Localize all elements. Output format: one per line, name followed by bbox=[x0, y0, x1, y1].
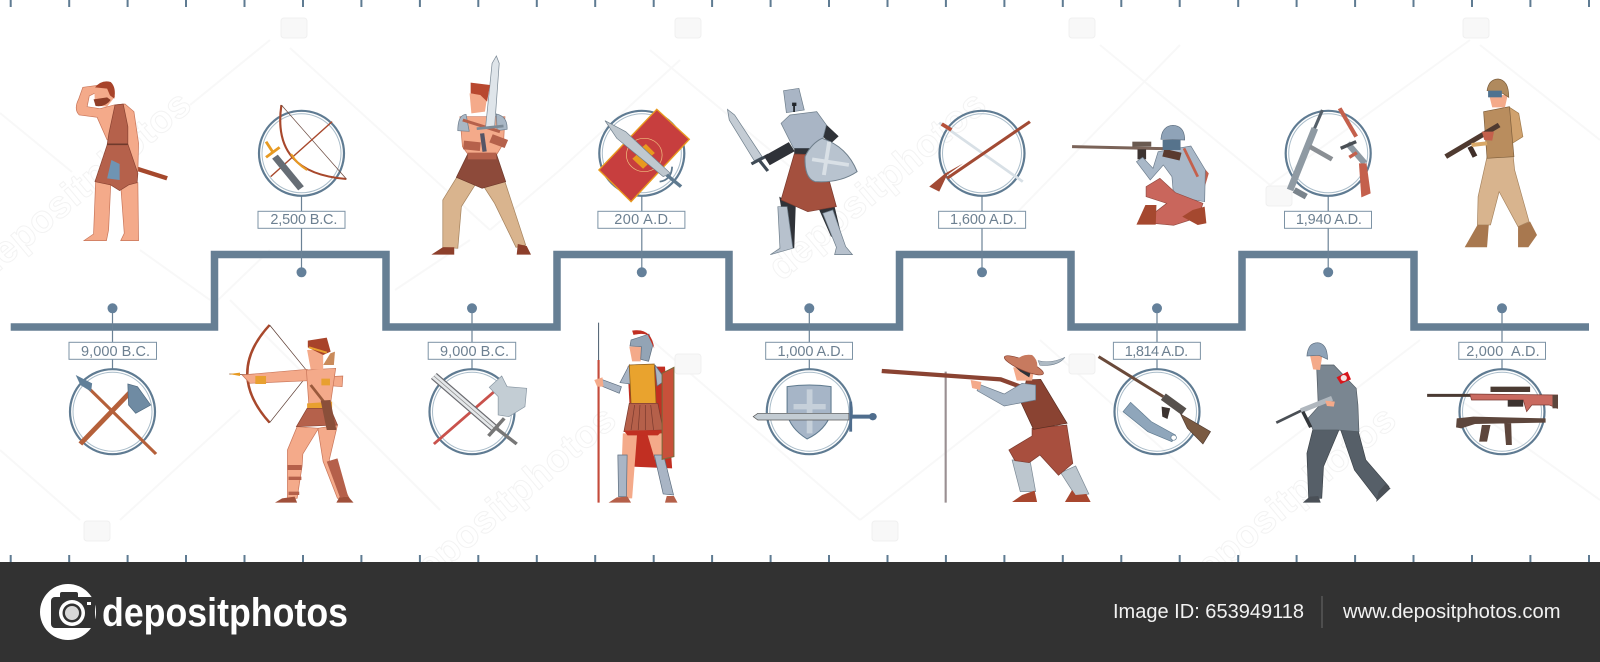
stepped timeline line bbox=[11, 254, 1589, 327]
milestone: 1,600 A.D.: 1,600 A.D. bbox=[950, 212, 1017, 228]
milestone: 1,940 A.D.: 1,940 A.D. bbox=[1296, 212, 1362, 228]
figure: archer bbox=[229, 325, 354, 503]
top ruler ticks bbox=[11, 0, 1589, 7]
logo wordmark: depositphotos bbox=[102, 591, 348, 635]
milestone: 1,600 A.D. bbox=[939, 111, 1026, 277]
website: www.depositphotos.com bbox=[1342, 601, 1560, 623]
milestone: 2,500 B.C.: 2,500 B.C. bbox=[270, 212, 337, 228]
milestone: 2,000 A.D. bbox=[1459, 303, 1546, 454]
icon: shield and sword bbox=[753, 385, 877, 439]
bottom ruler ticks bbox=[11, 555, 1589, 562]
milestone: 200 A.D.: 200 A.D. bbox=[614, 212, 672, 228]
milestone: 2,000 A.D.: 2,000 A.D. bbox=[1466, 344, 1540, 360]
icon: sniper rifle and smg bbox=[1427, 387, 1558, 445]
footer bar bbox=[0, 562, 1600, 662]
watermark layer: depositphotos bbox=[760, 83, 994, 289]
figure: musketeer bbox=[882, 352, 1091, 503]
figure: roman legionary bbox=[594, 323, 677, 503]
watermark layer: depositphotos bbox=[390, 398, 624, 604]
icon: sword and bow bbox=[266, 105, 346, 188]
figure: knight bbox=[727, 88, 857, 255]
icon: rifle and grenade bbox=[1099, 357, 1211, 444]
milestone: 9,000 B.C. first bbox=[69, 303, 156, 454]
icon: roman shield and gladius bbox=[599, 109, 689, 202]
icon: long sword and battle axe bbox=[434, 376, 527, 444]
image id: Image ID: 653949118 bbox=[1113, 601, 1304, 623]
milestone: 1,000 A.D.: 1,000 A.D. bbox=[778, 344, 844, 360]
milestone: 1,000 A.D. bbox=[766, 303, 852, 454]
milestone: 200 A.D. bbox=[598, 111, 685, 277]
figure: caveman with club bbox=[76, 81, 167, 241]
figure: swordsman bbox=[431, 56, 531, 255]
milestone: 1,814 A.D.: 1,814 A.D. bbox=[1125, 344, 1188, 360]
icon: musket and sabre bbox=[929, 122, 1030, 192]
watermark layer: depositphotos bbox=[1170, 398, 1404, 604]
separator bbox=[1321, 596, 1323, 628]
figure: german soldier running bbox=[1276, 343, 1391, 503]
milestone: 1,814 A.D. bbox=[1113, 303, 1200, 454]
figure: kneeling rifleman bbox=[1072, 125, 1209, 225]
milestone: 9,000 B.C. first: 9,000 B.C. bbox=[81, 344, 150, 360]
milestone: 9,000 B.C. second bbox=[428, 303, 516, 454]
logo: depositphotos camera badge bbox=[40, 584, 96, 640]
milestone: 9,000 B.C. second: 9,000 B.C. bbox=[440, 344, 509, 360]
milestone: 2,500 B.C. bbox=[258, 111, 345, 277]
milestone: 1,940 A.D. bbox=[1284, 111, 1372, 277]
icon: spear and stone axe bbox=[76, 375, 156, 454]
icon: submachine guns bbox=[1290, 108, 1371, 197]
figure: modern soldier bbox=[1446, 79, 1537, 247]
